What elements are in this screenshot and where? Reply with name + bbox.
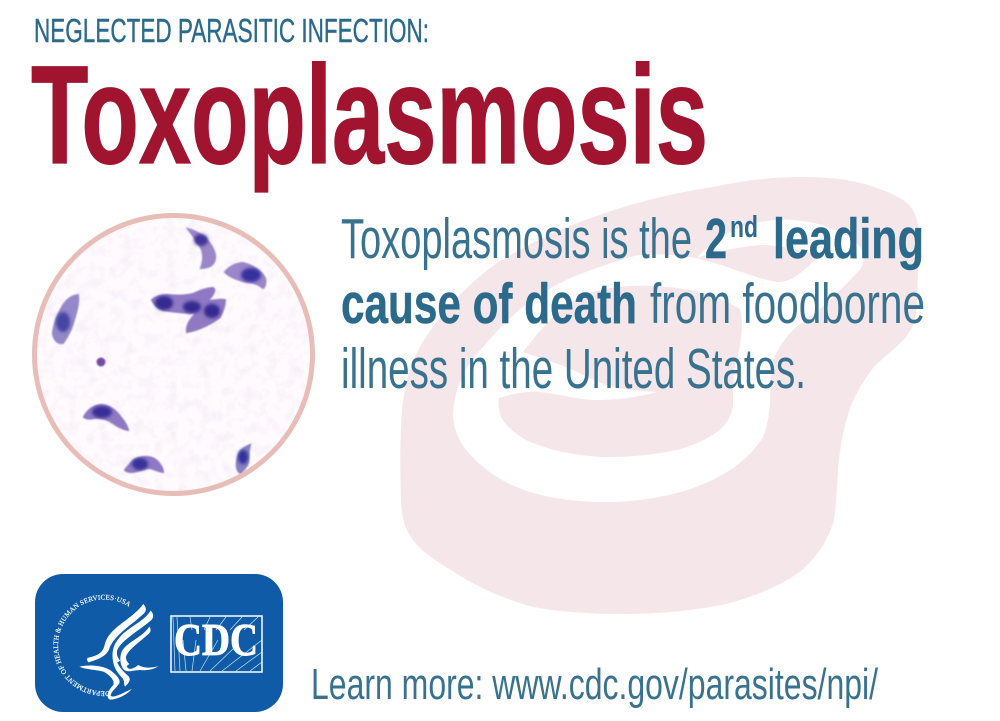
main statement text: nd xyxy=(730,209,758,244)
background icon: pale steak cut of meat xyxy=(400,177,919,614)
CDC box xyxy=(171,615,262,672)
parasite: lower left xyxy=(84,405,128,430)
main statement text: leading xyxy=(773,207,924,271)
main statement text: 2 xyxy=(705,207,727,271)
parasite: top crescent xyxy=(188,229,215,268)
main statement text xyxy=(341,207,925,401)
parasite: central cluster xyxy=(152,288,225,332)
parasite: small dot xyxy=(96,358,106,366)
eyebrow heading: NEGLECTED PARASITIC INFECTION: xyxy=(34,12,429,49)
CDC wordmark: CDC xyxy=(174,615,258,665)
parasite: lower right xyxy=(237,445,250,473)
logo: HHS and CDC badge xyxy=(35,574,283,712)
main statement text: cause of death xyxy=(341,272,637,336)
seal text: DEPARTMENT OF HEALTH & HUMAN SERVICES·USA xyxy=(53,594,130,696)
parasite: top right xyxy=(225,263,265,288)
icon: HHS eagle xyxy=(79,604,158,700)
micrograph of Toxoplasma parasites xyxy=(30,210,320,500)
parasite: bottom xyxy=(125,457,163,472)
main statement text: Toxoplasmosis is the xyxy=(341,207,692,271)
parasite: left xyxy=(53,295,78,343)
